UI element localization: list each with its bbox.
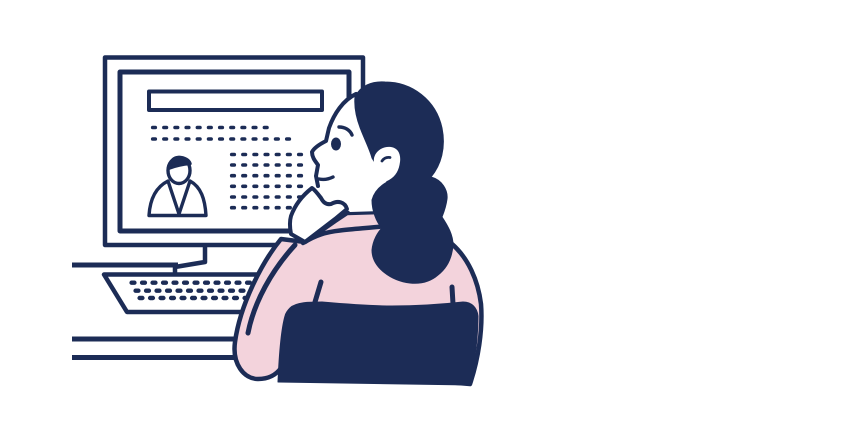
sweater body [235,212,481,384]
sleeve crease [248,245,295,333]
face and neck [312,94,395,212]
hair [355,82,453,283]
text lines on screen [153,128,291,139]
computer monitor [105,58,363,245]
desk lines [72,265,240,358]
collar line [303,226,382,243]
ear [374,147,400,184]
title bar on screen [149,92,322,110]
eye [331,138,341,150]
raised hand and forearm [290,188,347,242]
chair back [278,302,478,385]
icon: profile avatar [149,158,206,216]
monitor stand [175,246,205,274]
ear detail [382,157,390,161]
chair straps [315,282,453,304]
keyboard keys [132,283,256,298]
keyboard [104,274,262,312]
eyebrow [339,127,352,135]
smile [319,177,333,179]
dotted data grid on screen [232,154,304,208]
woman [235,82,481,385]
